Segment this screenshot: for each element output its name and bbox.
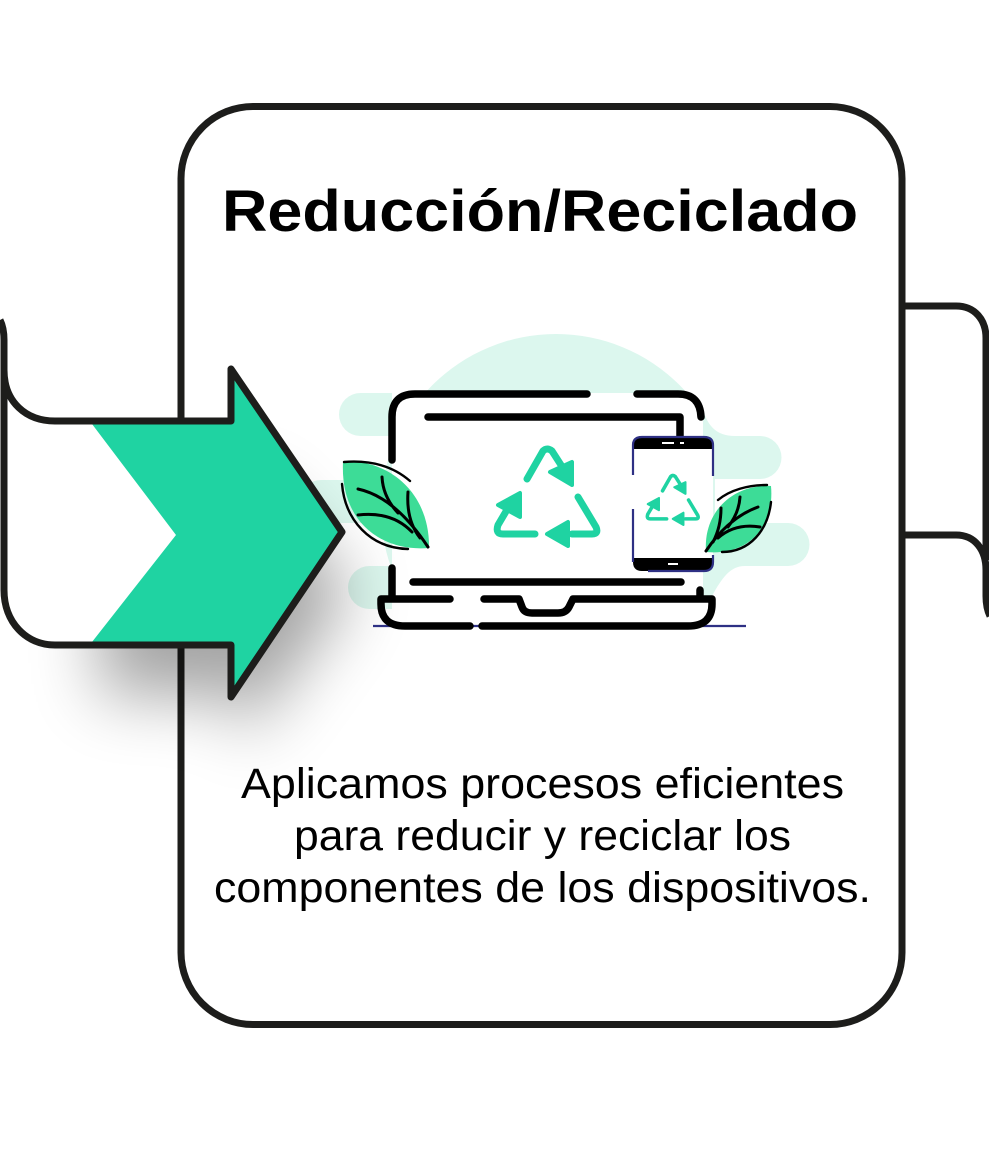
description text (214, 760, 871, 912)
panel: card outline (181, 106, 902, 1024)
arrow drop shadow (100, 470, 352, 745)
icon: left leaf (342, 462, 429, 549)
left connector white fill (4, 370, 231, 645)
description text: para reducir y reciclar los (294, 812, 791, 860)
illustration background clouds (384, 334, 810, 596)
arrow: green chevron (0, 320, 342, 697)
right connector joins (902, 306, 930, 535)
icon: laptop with recycling (342, 394, 771, 626)
laptop screen white mask (392, 393, 703, 600)
description text: Aplicamos procesos eficientes (241, 760, 844, 808)
right connector lines (902, 306, 989, 616)
laptop outline (381, 394, 712, 626)
phone (633, 436, 713, 571)
heading: Reducción/Reciclado (222, 179, 858, 244)
icon: large recycling symbol (497, 449, 597, 546)
icon: right leaf (706, 485, 771, 552)
description text: componentes de los dispositivos. (214, 864, 871, 912)
laptop base line (373, 625, 746, 627)
icon: small recycling symbol (647, 476, 698, 525)
left clouds (300, 393, 392, 609)
